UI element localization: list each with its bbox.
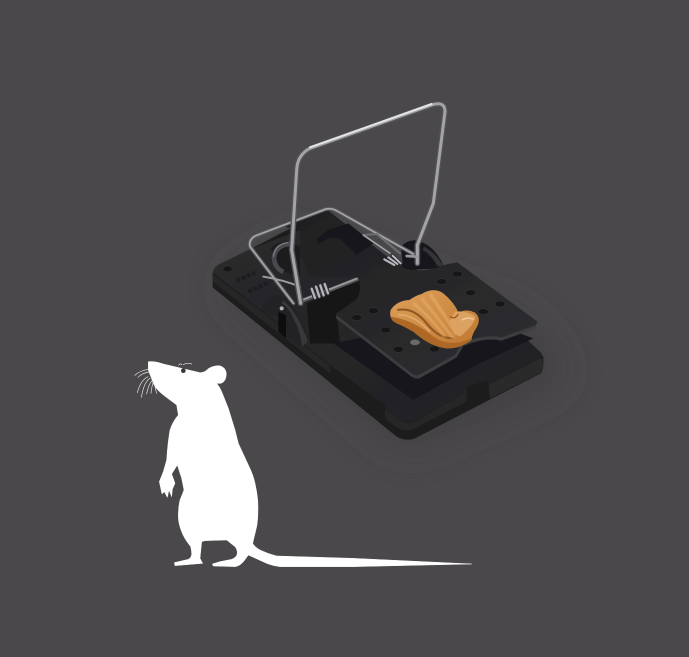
mouse trap bbox=[213, 104, 543, 440]
rat silhouette bbox=[135, 362, 472, 567]
lower body and pivots bbox=[271, 230, 444, 343]
treadle holes bbox=[352, 271, 505, 352]
rear spring bbox=[384, 256, 401, 265]
trap base bbox=[213, 223, 543, 440]
front spring bbox=[304, 279, 357, 300]
bail wire bbox=[292, 104, 445, 303]
rat whiskers bbox=[135, 363, 192, 397]
shadow of trap bbox=[225, 240, 565, 445]
peanut butter bait bbox=[390, 290, 479, 348]
striker wire frame bbox=[250, 209, 413, 303]
treadle plate and arm bbox=[283, 211, 537, 379]
front pivot bracket bbox=[263, 296, 308, 347]
embossed marks bbox=[237, 273, 270, 292]
rat eye bbox=[181, 368, 186, 373]
rat body bbox=[148, 362, 472, 567]
base screw hole bbox=[224, 267, 232, 271]
side coil bbox=[273, 243, 290, 272]
